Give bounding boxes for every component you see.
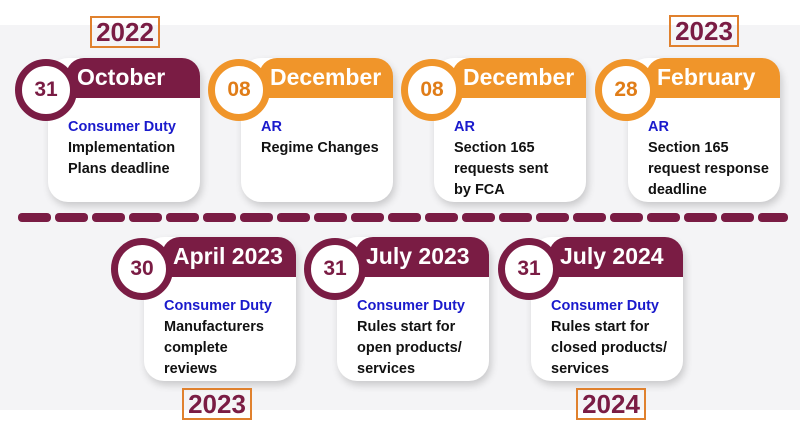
card: 31 July 2024: closed products/ — [551, 340, 667, 356]
dashed timeline — [18, 213, 788, 222]
card: 31 July 2024: Rules start for — [551, 319, 649, 335]
card: 31 October: October — [77, 64, 165, 90]
card: 28 February: Section 165 — [648, 140, 729, 156]
card: 28 February: February — [657, 64, 755, 90]
card: 28 February — [595, 58, 786, 210]
text: 28 — [614, 78, 638, 101]
card: 08 December AR regime: Regime Changes — [261, 140, 379, 156]
text: 31 — [34, 78, 58, 101]
card: 31 October: Implementation — [68, 140, 175, 156]
card: 31 July 2023: open products/ — [357, 340, 462, 356]
card: 31 July 2024: services — [551, 361, 609, 377]
card: 30 April 2023: complete — [164, 340, 228, 356]
card: 30 April 2023: reviews — [164, 361, 217, 377]
card: 08 December Section 165: by FCA — [454, 182, 505, 198]
card: 31 October: Plans deadline — [68, 161, 170, 177]
text: 31 — [323, 257, 347, 280]
card: 30 April 2023: Manufacturers — [164, 319, 264, 335]
card: 08 December AR regime: AR — [261, 119, 282, 135]
text: 08 — [420, 78, 444, 101]
card: 08 December Section 165: December — [463, 64, 574, 90]
year label 2022: 2022 — [96, 17, 154, 47]
card: 31 July 2024: July 2024 — [560, 243, 664, 269]
text: 31 — [517, 257, 541, 280]
year label 2023 bottom: 2023 — [188, 389, 246, 419]
card: 08 December Section 165: Section 165 — [454, 140, 535, 156]
year label 2024: 2024 — [582, 389, 640, 419]
year label 2023 top: 2023 — [675, 16, 733, 46]
card: 31 July 2023 — [304, 237, 494, 388]
card: 08 December Section 165: requests sent — [454, 161, 548, 177]
card: 31 July 2024 — [498, 237, 688, 388]
card: 30 April 2023: April 2023 — [173, 243, 283, 269]
card: 08 December Section 165 — [401, 58, 592, 210]
card: 31 July 2023: Consumer Duty — [357, 298, 465, 314]
card: 28 February: deadline — [648, 182, 707, 198]
card: 31 July 2023: July 2023 — [366, 243, 470, 269]
card: 30 April 2023 — [111, 237, 302, 388]
card: 31 July 2023: Rules start for — [357, 319, 455, 335]
card: 31 July 2023: services — [357, 361, 415, 377]
card: 31 October: Consumer Duty — [68, 119, 176, 135]
text: 30 — [130, 257, 154, 280]
card: 08 December Section 165: AR — [454, 119, 475, 135]
card: 30 April 2023: Consumer Duty — [164, 298, 272, 314]
card: 31 July 2024: Consumer Duty — [551, 298, 659, 314]
card: 28 February: AR — [648, 119, 669, 135]
card: 31 October — [15, 58, 206, 210]
card: 08 December AR regime: December — [270, 64, 381, 90]
text: 08 — [227, 78, 251, 101]
card: 28 February: request response — [648, 161, 769, 177]
card: 08 December AR regime — [208, 58, 398, 210]
